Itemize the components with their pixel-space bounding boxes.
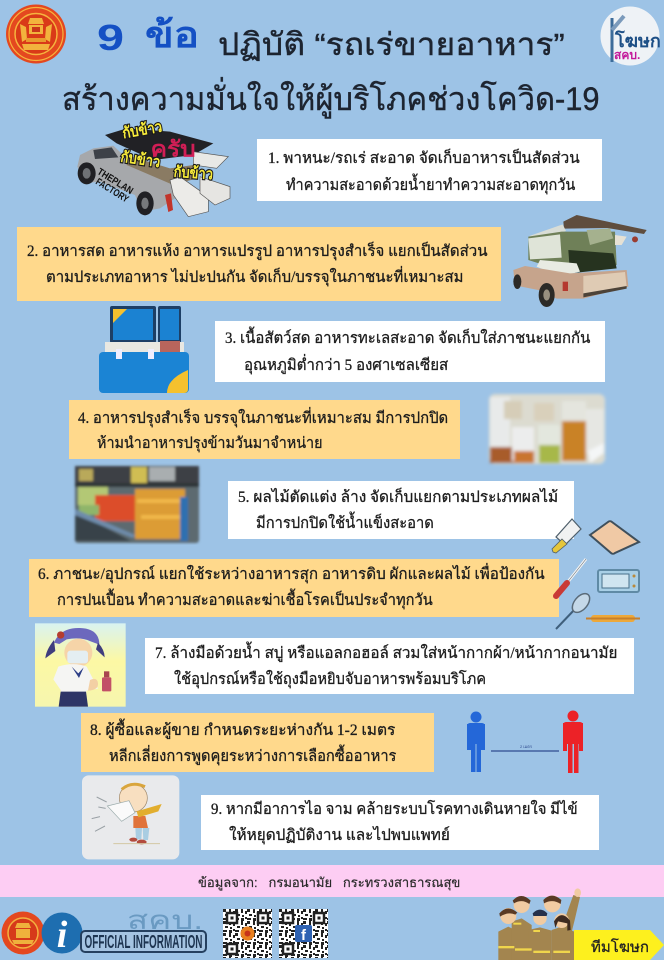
title number: 9 bbox=[97, 17, 124, 58]
QR code 1 bbox=[223, 909, 272, 958]
icon: fruit stall photo bbox=[73, 464, 201, 545]
title text: ปฏิบัติ “รถเร่ขายอาหาร” bbox=[218, 27, 565, 62]
panel: item 9: ให้หยุดปฏิบัติงาน และไปพบแพทย์ bbox=[229, 827, 450, 844]
panel: item 6 bbox=[29, 559, 559, 617]
panel: item 5 bbox=[228, 481, 574, 539]
icon: vegetable truck photo bbox=[513, 215, 647, 307]
title line 1 bbox=[97, 14, 565, 62]
panel: item 2: 2. อาหารสด อาหารแห้ง อาหารแปรรูป อาหารปรุงสำเร็จ แยกเป็นสัดส่วน bbox=[27, 243, 487, 260]
panel: item 7: ใช้อุปกรณ์หรือใช้ถุงมือหยิบจับอาหารพร้อมบริโภค bbox=[174, 671, 486, 688]
icon: two people at distance: 2 เมตร bbox=[520, 744, 533, 749]
panel: item 4: 4. อาหารปรุงสำเร็จ บรรจุในภาชนะที่เหมาะสม มีการปกปิด bbox=[78, 410, 448, 427]
panel: item 6: การปนเปื้อน ทำความสะอาดและฆ่าเชื้อโรคเป็นประจำทุกวัน bbox=[57, 592, 433, 609]
icon: food pickup truck: ครับ bbox=[151, 137, 196, 162]
footer logo: official information bbox=[2, 905, 207, 956]
panel: item 8 bbox=[81, 713, 434, 772]
panel: item 5: มีการปกปิดใช้น้ำแข็งสะอาด bbox=[256, 515, 434, 532]
panel: item 8: 8. ผู้ซื้อและผู้ขาย กำหนดระยะห่างกัน 1-2 เมตร bbox=[90, 722, 395, 739]
icon: girl with mask bbox=[35, 623, 126, 707]
panel: item 1: ทำความสะอาดด้วยน้ำยาทำความสะอาดทุกวัน bbox=[286, 177, 575, 194]
panel: item 1 bbox=[257, 139, 602, 201]
QR code 2: f bbox=[301, 927, 307, 944]
seal: top left bbox=[6, 4, 66, 64]
icon: sneezing child bbox=[82, 775, 180, 860]
icon: food pickup truck: FACTORY bbox=[93, 177, 131, 205]
QR code 2 bbox=[279, 909, 328, 958]
panel: item 8: หลีกเลี่ยงการพูดคุยระหว่างการเลือกซื้ออาหาร bbox=[109, 748, 396, 765]
panel: item 1: 1. พาหนะ/รถเร่ สะอาด จัดเก็บอาหารเป็นสัดส่วน bbox=[268, 150, 580, 167]
panel: item 2: ตามประเภทอาหาร ไม่ปะปนกัน จัดเก็บ/บรรจุในภาชนะที่เหมาะสม bbox=[46, 269, 464, 286]
title word: ข้อ bbox=[145, 14, 199, 55]
source band bbox=[0, 865, 664, 897]
icon: bagged food photo bbox=[487, 392, 607, 466]
panel: item 7 bbox=[145, 638, 634, 694]
icon: kitchen tools bbox=[552, 518, 641, 630]
panel: item 3: อุณหภูมิต่ำกว่า 5 องศาเซลเซียส bbox=[244, 357, 448, 374]
panel: item 9 bbox=[201, 795, 599, 850]
panel: item 9: 9. หากมีอาการไอ จาม คล้ายระบบโรคทางเดินหายใจ มีไข้ bbox=[211, 801, 578, 818]
icon: food pickup truck: กับข้าว bbox=[119, 148, 162, 171]
source text: ข้อมูลจาก: กรมอนามัย กระทรวงสาธารณสุข bbox=[198, 875, 460, 890]
icon: two people at distance bbox=[467, 710, 583, 773]
badge text: ทีมโฆษก bbox=[591, 939, 649, 956]
panel: item 3 bbox=[215, 321, 605, 382]
panel: item 4 bbox=[69, 400, 460, 459]
icon: food pickup truck: THEPLAN bbox=[95, 167, 135, 197]
panel: item 2 bbox=[17, 227, 501, 301]
icon: blue cooler bbox=[99, 306, 189, 393]
icon: food pickup truck bbox=[77, 118, 230, 217]
panel: item 6: 6. ภาชนะ/อุปกรณ์ แยกใช้ระหว่างอาหารสุก อาหารดิบ ผักและผลไม้ เพื่อป้องกัน bbox=[38, 566, 545, 583]
footer logo: official information: สคบ. bbox=[127, 905, 203, 935]
panel: item 5: 5. ผลไม้ตัดแต่ง ล้าง จัดเก็บแยกตามประเภทผลไม้ bbox=[238, 489, 558, 506]
title line 2: สร้างความมั่นใจให้ผู้บริโภคช่วงโควิด-19 bbox=[62, 81, 600, 117]
icon: officers group bbox=[498, 888, 581, 960]
panel: item 3: 3. เนื้อสัตว์สด อาหารทะเลสะอาด จัดเก็บใส่ภาชนะแยกกัน bbox=[225, 330, 590, 347]
logo: spokesperson bbox=[600, 6, 660, 66]
panel: item 4: ห้ามนำอาหารปรุงข้ามวันมาจำหน่าย bbox=[97, 435, 323, 452]
logo: spokesperson: สคบ. bbox=[614, 48, 640, 62]
icon: food pickup truck: กับข้าว bbox=[173, 163, 214, 183]
panel: item 7: 7. ล้างมือด้วยน้ำ สบู่ หรือแอลกอฮอล์ สวมใส่หน้ากากผ้า/หน้ากากอนามัย bbox=[155, 645, 617, 662]
footer logo: official information: i bbox=[57, 914, 68, 956]
badge: spokesperson team arrow bbox=[574, 930, 664, 960]
icon: food pickup truck: กับข้าว bbox=[121, 118, 163, 142]
logo: spokesperson: โฆษก bbox=[614, 30, 660, 51]
